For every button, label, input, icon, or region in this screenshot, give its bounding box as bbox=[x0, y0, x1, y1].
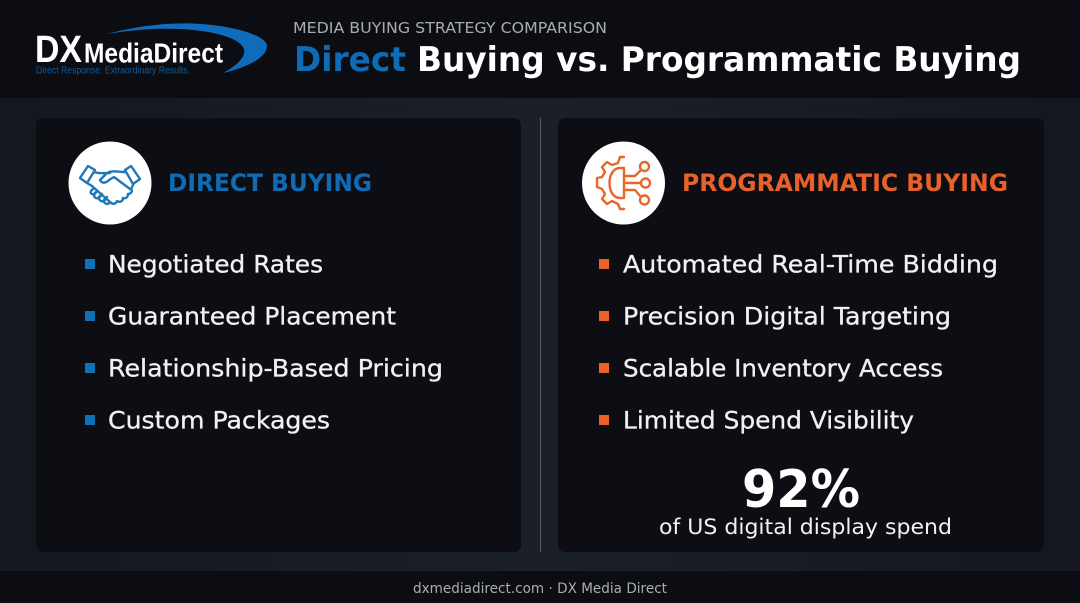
footer: dxmediadirect.com · DX Media Direct bbox=[413, 581, 667, 597]
heading: direct buying: DIRECT BUYING bbox=[168, 169, 372, 197]
title: Direct bbox=[294, 40, 406, 80]
logo bbox=[35, 23, 267, 76]
stat: 92%: 92% bbox=[742, 460, 860, 520]
list item: Guaranteed Placement bbox=[108, 302, 396, 330]
icon: handshake bbox=[68, 142, 152, 224]
icon: circuit gear bbox=[582, 142, 665, 224]
heading: programmatic buying: PROGRAMMATIC BUYING bbox=[682, 169, 1008, 197]
list item: Precision Digital Targeting bbox=[623, 302, 951, 330]
eyebrow: MEDIA BUYING STRATEGY COMPARISON bbox=[293, 19, 607, 37]
logo wordmark bbox=[35, 29, 223, 71]
list item: Negotiated Rates bbox=[108, 250, 323, 278]
logo wordmark: DX bbox=[35, 29, 83, 71]
panel: direct buying bbox=[36, 118, 521, 552]
list item: Custom Packages bbox=[108, 406, 330, 434]
stat: 92% bbox=[659, 460, 952, 539]
list item: Automated Real-Time Bidding bbox=[623, 250, 998, 278]
footer bbox=[0, 571, 1080, 603]
list item: Scalable Inventory Access bbox=[623, 354, 943, 382]
stat caption: of US digital display spend bbox=[659, 515, 952, 539]
logo swoosh bbox=[107, 23, 267, 73]
list item: Relationship-Based Pricing bbox=[108, 354, 443, 382]
title: Buying vs. Programmatic Buying bbox=[417, 40, 1021, 80]
logo tagline: Direct Response. Extraordinary Results. bbox=[36, 66, 190, 76]
panel: programmatic buying bbox=[558, 118, 1044, 552]
list item: Limited Spend Visibility bbox=[623, 406, 914, 434]
header bar bbox=[0, 0, 1080, 98]
list: direct buying bbox=[85, 250, 443, 434]
list: programmatic buying bbox=[599, 250, 998, 434]
logo wordmark: MediaDirect bbox=[84, 38, 223, 68]
